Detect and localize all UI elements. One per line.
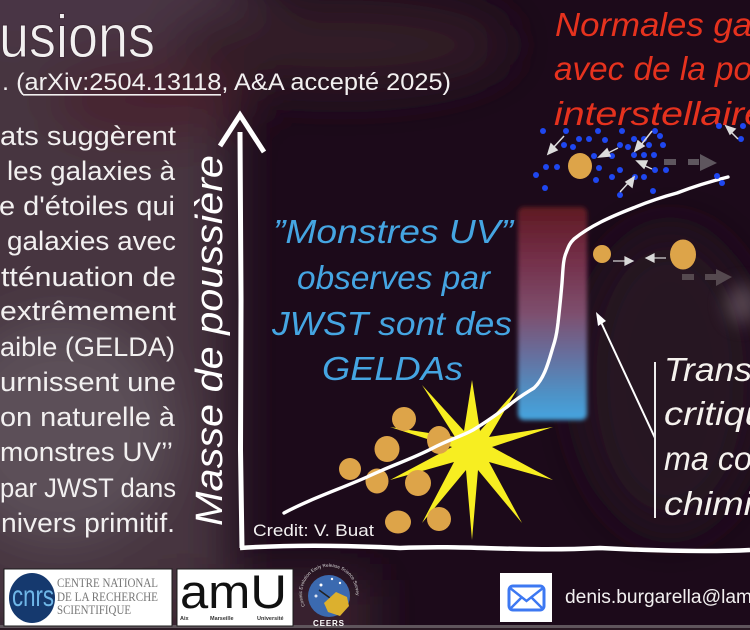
- large dusty galaxy: [568, 153, 592, 179]
- logo: CNRS: DE LA RECHERCHE: [57, 590, 158, 604]
- conclusion paragraph: ats suggèrent: [0, 121, 177, 151]
- divider bracket: [654, 362, 656, 518]
- transition gradient bar: [518, 207, 587, 420]
- caption: UV monsters: GELDAs: [322, 350, 463, 387]
- logo: CNRS: cnrs: [12, 580, 54, 613]
- UV-bright galaxies: [339, 407, 451, 534]
- conclusion paragraph: tténuation de: [1, 262, 176, 292]
- caption: normal galaxies: Normales ga: [555, 6, 750, 43]
- caption: critical transition: Trans: [664, 351, 750, 388]
- conclusion paragraph: nivers primitif.: [1, 508, 175, 538]
- dust grains: [533, 123, 746, 198]
- conclusion paragraph: extrêmement: [0, 296, 177, 326]
- growth arrow gray: [664, 154, 717, 171]
- starburst: [390, 380, 553, 540]
- small and medium galaxies: [593, 240, 696, 270]
- reference line: . (arXiv:2504.13118, A&A accepté 2025): [2, 69, 451, 96]
- merging arrows: [613, 254, 666, 265]
- dust motion arrows: [548, 126, 738, 192]
- caption: normal galaxies: avec de la po: [554, 50, 750, 87]
- conclusion paragraph: galaxies avec: [7, 226, 176, 256]
- caption: UV monsters: JWST sont des: [271, 305, 512, 342]
- x axis: [240, 546, 750, 551]
- caption: UV monsters: ”Monstres UV”: [273, 213, 515, 250]
- caption: critical transition: [664, 351, 750, 522]
- logo: CNRS: [4, 569, 172, 626]
- logo: CNRS: CENTRE NATIONAL: [57, 576, 158, 590]
- y axis arrow: [220, 115, 264, 548]
- conclusion paragraph: e d'étoiles qui: [0, 191, 175, 221]
- icon: email: [500, 573, 552, 622]
- email address: denis.burgarella@lam: [565, 587, 750, 608]
- logo: amU: amU: [180, 565, 287, 618]
- conclusion paragraph: [0, 121, 177, 538]
- logo: amU: Université: [257, 616, 284, 622]
- y axis label: Masse de poussière: [189, 155, 231, 526]
- conclusion paragraph: on naturelle à: [0, 402, 176, 432]
- caption: UV monsters: observes par: [297, 259, 492, 296]
- caption: UV monsters: [271, 213, 515, 387]
- conclusion paragraph: aible (GELDA): [0, 332, 175, 362]
- logo: CNRS: SCIENTIFIQUE: [57, 603, 131, 617]
- pointer arrow to transition: [596, 312, 655, 438]
- caption: critical transition: critiqu: [664, 395, 750, 432]
- logo: CEERS: Cosmic Evolution Early Release Science Survey: [298, 563, 359, 607]
- growth arrow gray lower: [682, 269, 732, 286]
- conclusion paragraph: urnissent une: [0, 367, 176, 397]
- caption: normal galaxies: [554, 6, 750, 132]
- logo: amU: Marseille: [210, 616, 234, 622]
- logo: CEERS: CEERS: [313, 619, 345, 628]
- dust mass curve: [284, 177, 728, 513]
- conclusion paragraph: monstres UV’’: [0, 437, 173, 467]
- conclusion paragraph: par JWST dans: [0, 473, 176, 503]
- caption: critical transition: chimi: [664, 485, 750, 522]
- title: usions: [0, 3, 155, 70]
- credit: Credit: V. Buat: [253, 521, 374, 540]
- conclusion paragraph: les galaxies à: [7, 156, 176, 186]
- logo: amU: Aix: [180, 616, 190, 622]
- logo: CEERS: [298, 563, 359, 628]
- caption: normal galaxies: interstellaire: [554, 95, 750, 132]
